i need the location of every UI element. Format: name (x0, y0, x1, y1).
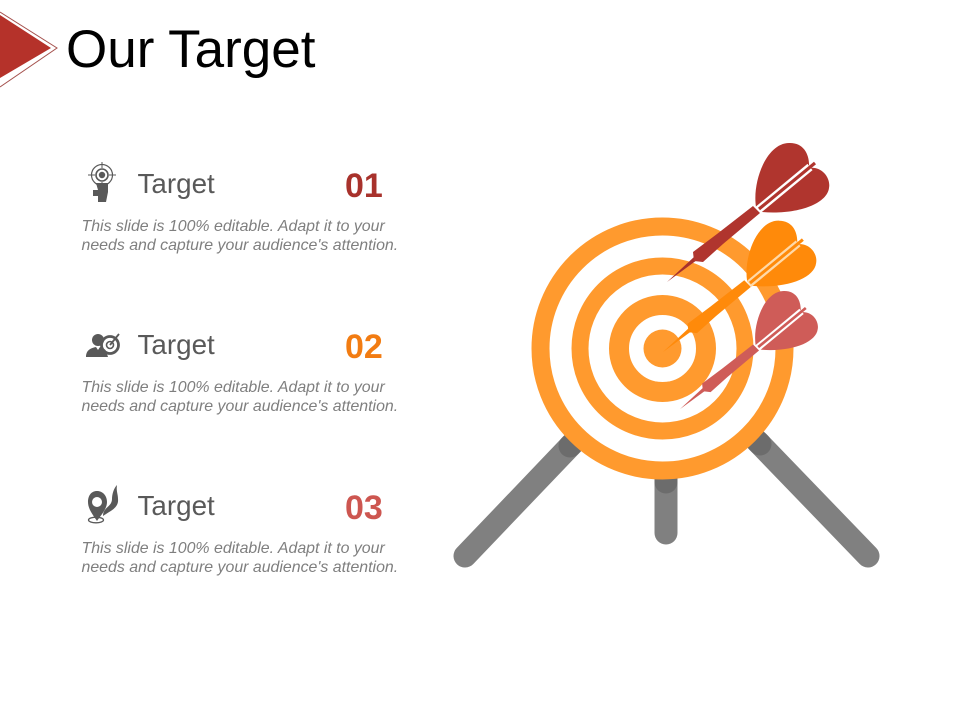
header arrow icon (0, 12, 57, 87)
description: This slide is 100% editable. Adapt it to your (82, 379, 385, 396)
description: needs and capture your audience's attention. (82, 237, 398, 254)
panel: target 03 (82, 485, 398, 576)
heading: Target (138, 490, 215, 521)
icon: map pin with road (88, 485, 118, 523)
panel: target 02 (82, 328, 398, 415)
title: Our Target (66, 20, 316, 79)
icon: businessman with target (86, 334, 119, 357)
heading: Target (138, 329, 215, 360)
heading: Target (138, 168, 215, 199)
description: This slide is 100% editable. Adapt it to your (82, 218, 385, 235)
target board on stand with darts (465, 143, 868, 556)
icon: crosshair with person (88, 162, 116, 202)
dart 2 (663, 221, 816, 352)
description: This slide is 100% editable. Adapt it to your (82, 540, 385, 557)
description: needs and capture your audience's attention. (82, 398, 398, 415)
number: 01 (345, 167, 383, 205)
dart 3 (680, 291, 818, 409)
number: 02 (345, 328, 383, 366)
bullseye rings (540, 226, 784, 470)
stand legs (465, 441, 868, 556)
dart 1 (667, 143, 829, 282)
number: 03 (345, 489, 383, 527)
panel: target 01 (82, 162, 398, 254)
description: needs and capture your audience's attention. (82, 559, 398, 576)
